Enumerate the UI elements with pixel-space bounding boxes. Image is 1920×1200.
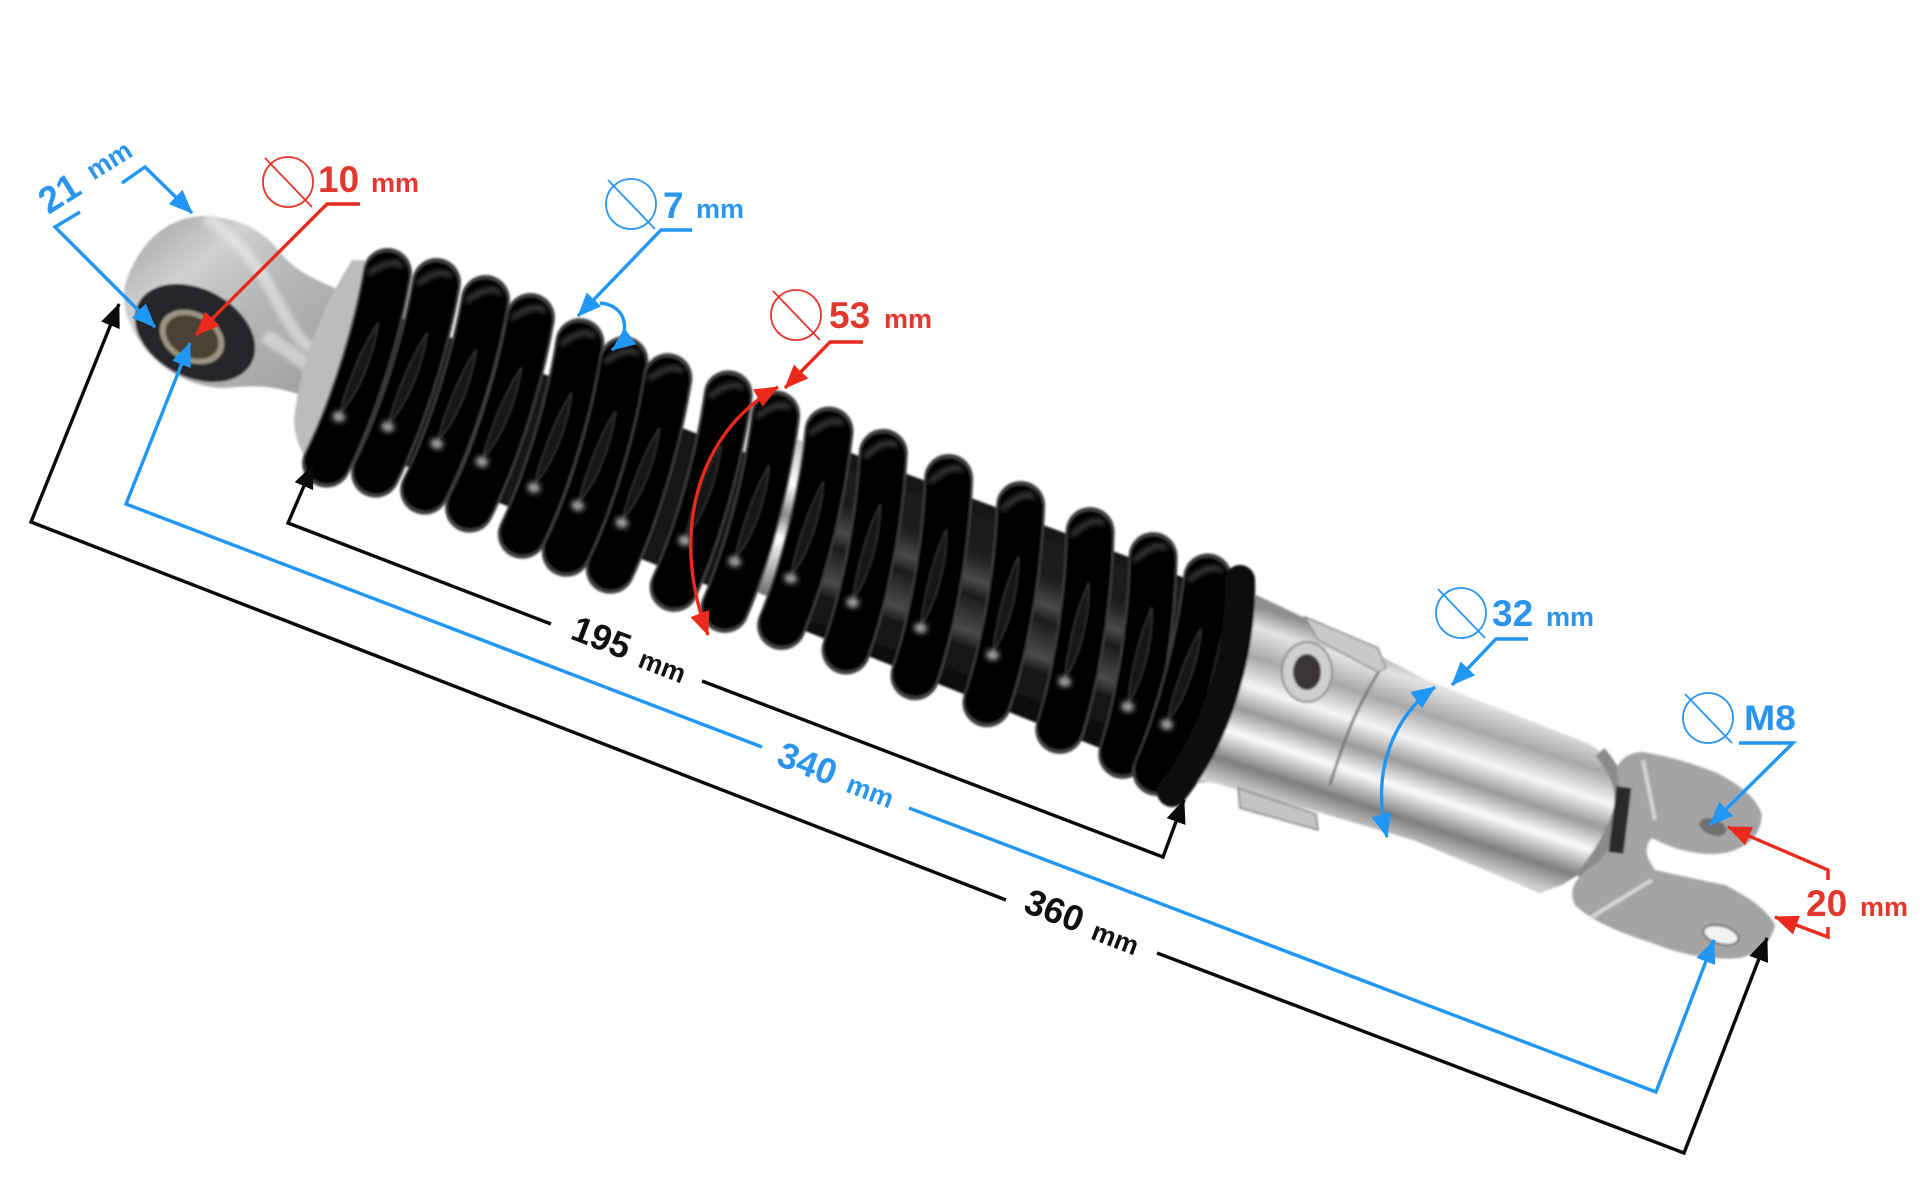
chrome lower housing [1180, 585, 1628, 893]
dimension 21 mm [31, 135, 192, 327]
clamp tab upper [1305, 617, 1386, 672]
shock absorber illustration [118, 216, 1775, 959]
dimension diameter 7 mm [578, 179, 744, 350]
dimension 21 mm: mm [81, 135, 138, 186]
dimension diameter 10 mm: 10 [318, 159, 359, 200]
metal sleeve [150, 299, 234, 375]
dimension diameter 7 mm: 7 [663, 185, 684, 226]
dimension 360 mm: mm [1087, 916, 1143, 961]
chrome rod [742, 432, 838, 606]
clamp tab lower [1238, 788, 1318, 830]
dimension diameter 53 mm [691, 290, 932, 635]
dimension 20 mm [1728, 827, 1908, 937]
damper tube [790, 447, 1230, 772]
dimension 360 mm [31, 304, 1767, 1153]
spring coils [315, 257, 1222, 776]
dimension 340 mm: 340 [772, 733, 843, 793]
dimension diameter M8: M8 [1744, 699, 1796, 738]
dimension diameter 10 mm: mm [371, 168, 419, 198]
sleeve hole [158, 306, 226, 368]
rod glints [453, 381, 630, 471]
dimension diameter 7 mm: mm [696, 194, 744, 224]
inner rod upper section [340, 310, 790, 600]
dimension diameter 32 mm: mm [1546, 602, 1594, 632]
dimension 20 mm: 20 [1806, 883, 1847, 924]
dimension diameter M8 [1683, 693, 1796, 825]
upper spring plate [294, 260, 400, 466]
dimension 195 mm [288, 465, 1184, 857]
dimension 340 mm: mm [842, 769, 898, 814]
housing step line [1330, 665, 1383, 785]
dimension 195 mm: 195 [566, 607, 637, 667]
bolt [1282, 642, 1332, 702]
eye mount [124, 216, 345, 395]
clevis yoke [1572, 752, 1775, 959]
tube end weld [1580, 752, 1621, 878]
dimension 21 mm: 21 [31, 165, 88, 222]
dimension diameter 32 mm: 32 [1492, 593, 1533, 634]
rubber bushing [118, 264, 272, 402]
dimension diameter 32 mm [1382, 588, 1594, 837]
lower spring plate [1172, 580, 1240, 792]
dimension 360 mm: 360 [1019, 880, 1090, 940]
dimension 195 mm: mm [634, 644, 690, 689]
dimension 340 mm [126, 343, 1714, 1092]
dimension 20 mm: mm [1860, 892, 1908, 922]
dimension diameter 10 mm [196, 157, 419, 335]
dimension diameter 53 mm: 53 [829, 295, 870, 336]
dimension diameter 53 mm: mm [884, 304, 932, 334]
